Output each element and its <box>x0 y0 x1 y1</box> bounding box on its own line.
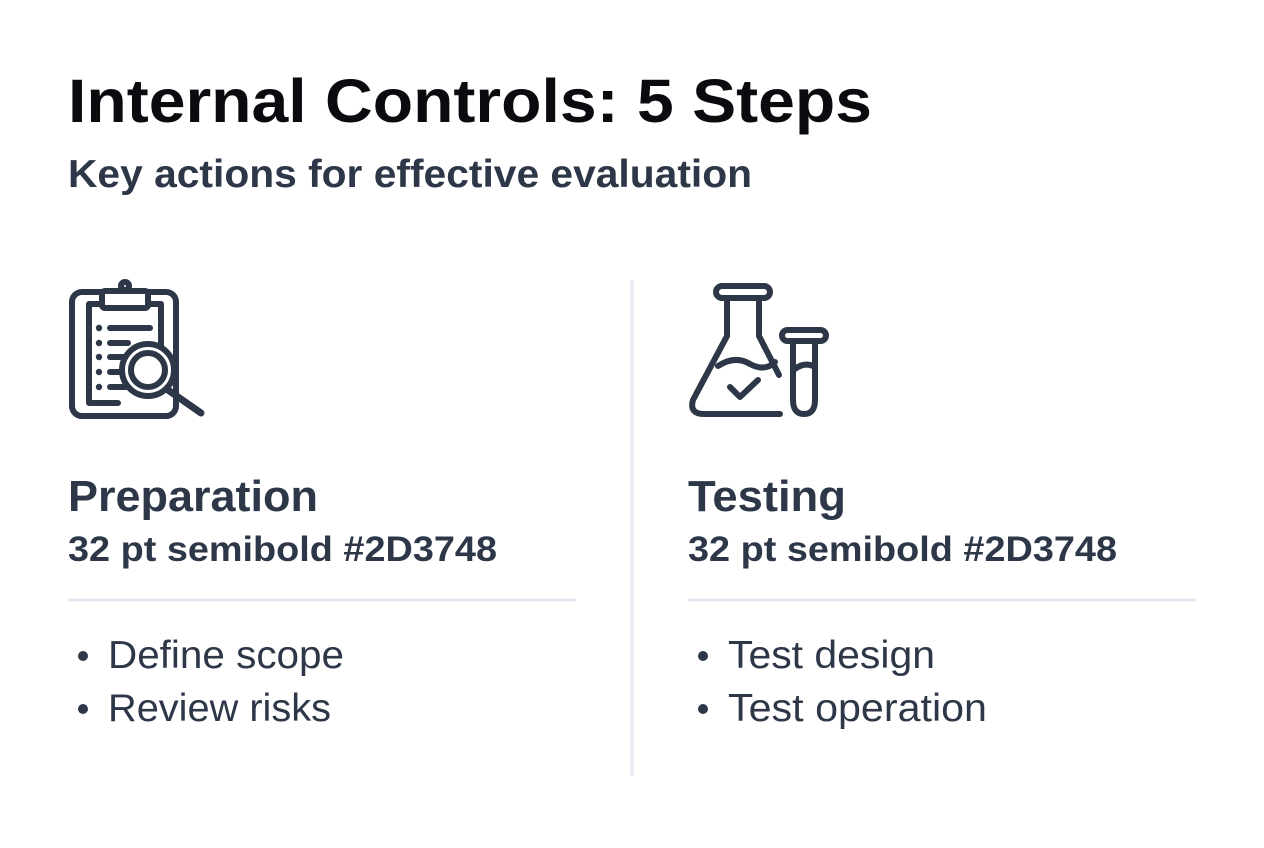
subtitle: Key actions for effective evaluation <box>68 153 752 196</box>
icon: flask and test tube <box>692 286 826 414</box>
heading: testing: Testing <box>688 472 846 521</box>
bullet list <box>698 634 987 730</box>
subheading: 32 pt semibold #2D3748 <box>68 530 497 569</box>
panel: preparation <box>68 282 576 730</box>
bullet list: Test operation <box>728 687 987 730</box>
bullet list: Define scope <box>108 634 344 677</box>
panel: testing <box>688 286 1196 730</box>
icon: clipboard with magnifier <box>72 282 201 416</box>
bullet list: Test design <box>728 634 935 677</box>
vertical divider <box>630 280 634 776</box>
bullet list: Review risks <box>108 687 331 730</box>
title: Internal Controls: 5 Steps <box>68 67 872 135</box>
heading: preparation: Preparation <box>68 472 318 521</box>
subheading: 32 pt semibold #2D3748 <box>688 530 1117 569</box>
bullet list <box>78 634 344 730</box>
